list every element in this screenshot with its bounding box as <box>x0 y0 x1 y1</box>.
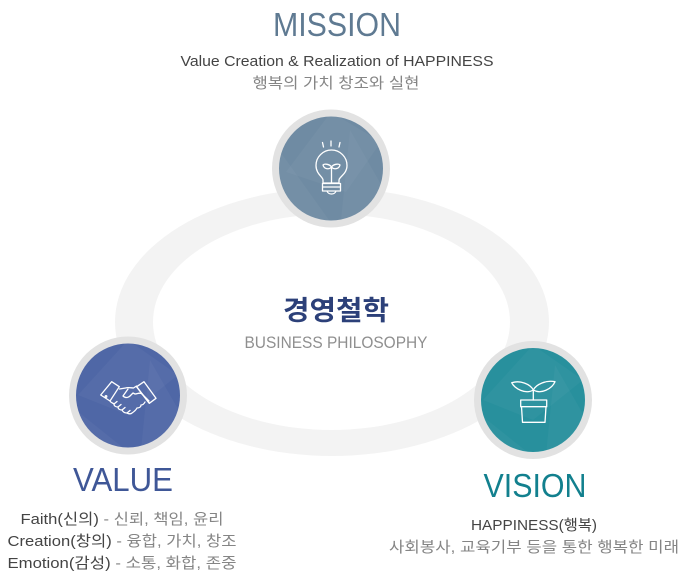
mission Korean description: 행복의 가치 창조와 실현 <box>252 75 420 92</box>
title: VISION <box>389 467 679 556</box>
title: VALUE: VALUE <box>73 461 173 498</box>
vision Korean description: 사회봉사, 교육기부 등을 통한 행복한 미래 <box>389 539 679 556</box>
mission circle <box>272 110 390 230</box>
center heading <box>244 296 428 352</box>
icon: handshake <box>101 382 156 414</box>
title: VALUE <box>8 461 237 572</box>
value list line 3: Emotion(감성) - 소통, 화합, 존중 <box>8 555 236 572</box>
center subheading: BUSINESS PHILOSOPHY <box>244 333 428 352</box>
value list line 1: Faith(신의) - 신뢰, 책임, 윤리 <box>20 511 224 528</box>
icon: plant pot <box>512 381 555 422</box>
title: VISION: VISION <box>484 467 586 504</box>
vision English description: HAPPINESS(행복) <box>471 517 597 534</box>
vision circle <box>471 341 595 465</box>
center heading: 경영철학 <box>283 296 389 326</box>
title: MISSION: MISSION <box>273 6 401 43</box>
icon: light bulb <box>316 141 347 194</box>
title: MISSION <box>180 6 494 92</box>
value circle <box>66 336 190 460</box>
mission English description: Value Creation & Realization of HAPPINESS <box>180 53 494 70</box>
central ring <box>115 188 549 456</box>
value list line 2: Creation(창의) - 융합, 가치, 창조 <box>8 533 237 550</box>
